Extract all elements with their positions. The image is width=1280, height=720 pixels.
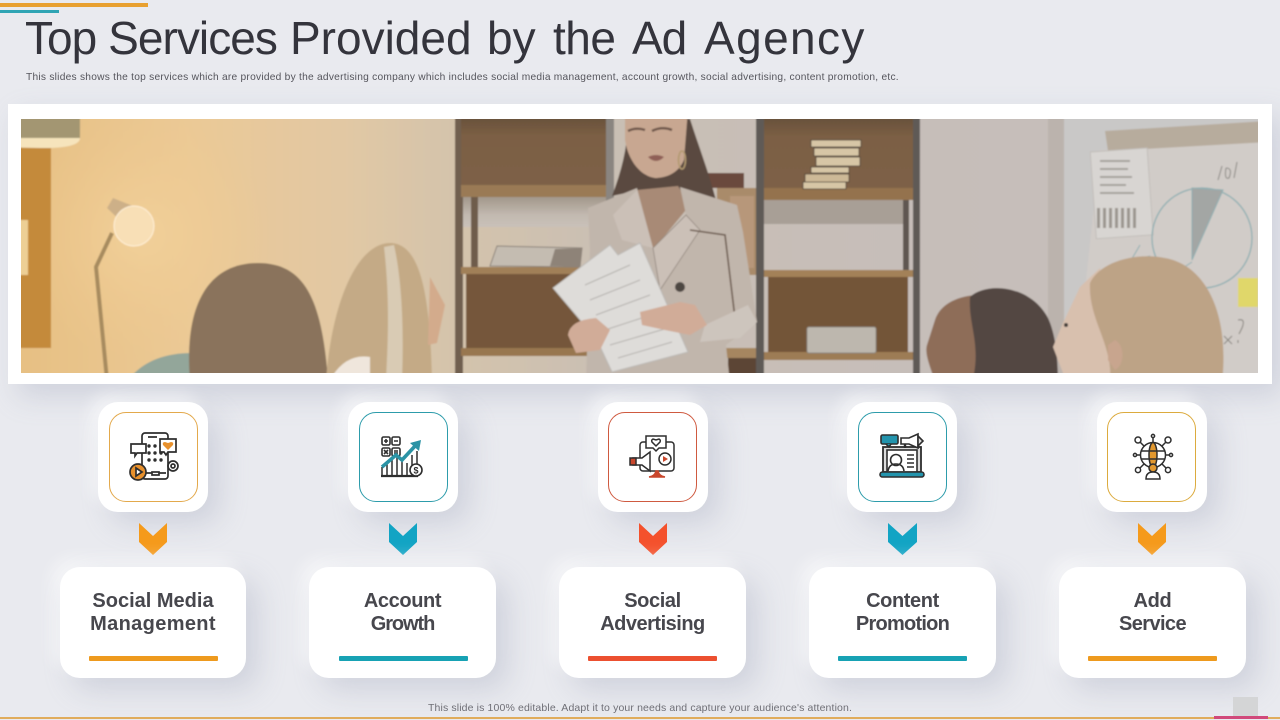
card: Add Service [1059,567,1246,678]
card: Social Advertising: Advertising [600,613,705,635]
page number placeholder [1233,697,1258,717]
tile: social advertising icon [598,402,708,512]
panel: photo frame [8,104,1272,384]
card: Social Media Management [60,567,246,678]
footer note: This slide is 100% editable. Adapt it to your needs and capture your audience's attention. [428,702,852,714]
card: Account Growth [309,567,496,678]
photo: presenter with team in meeting room [21,119,1258,373]
title [25,12,866,64]
icon: phone with chat, heart and play [129,432,179,481]
top accent lines [0,3,148,13]
card: Content Promotion: Promotion [856,613,949,635]
card: Social Advertising [559,567,746,678]
arrow: chevron 1 [139,523,167,555]
card: Social Advertising: Social [624,590,681,612]
title: the [553,12,615,64]
card: Social Media Management: Social Media [92,590,214,612]
card: Account Growth: Growth [371,613,434,635]
title: by [487,12,536,64]
card: Add Service: Add [1134,590,1171,612]
tile: social media icon [98,402,208,512]
title: Provided [290,12,472,64]
bottom accent line [0,716,1280,719]
icon: monitor with megaphone [629,435,675,478]
tile: add service icon [1097,402,1207,512]
subtitle: This slides shows the top services which are provided by the advertising company which includes social media management, account growth, social advertising, content promotion, etc. [26,72,899,83]
icon: calculator and growth chart [380,436,423,478]
title: Top Services [25,12,277,64]
arrow: chevron 5 [1138,523,1166,555]
arrow: chevron 3 [639,523,667,555]
title: Agency [704,12,866,64]
icon: calculator and growth chart: $ [413,466,419,476]
title: Ad [632,12,686,64]
card: Content Promotion [809,567,996,678]
card: Content Promotion: Content [866,590,939,612]
card: Account Growth: Account [364,590,441,612]
card: Social Media Management: Management [90,613,216,635]
arrow: chevron 2 [389,523,417,555]
tile: content promotion icon [847,402,957,512]
card: Add Service: Service [1119,613,1186,635]
icon: laptop with presenter and megaphone [879,432,925,478]
icon: globe network with user [1132,434,1174,480]
tile: account growth icon [348,402,458,512]
arrow: chevron 4 [888,523,917,555]
